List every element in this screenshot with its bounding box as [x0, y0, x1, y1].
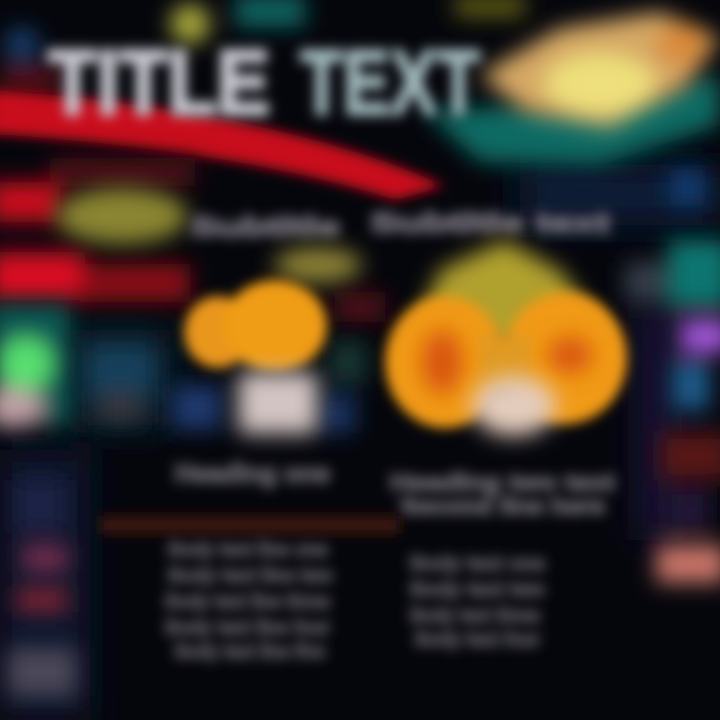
text block: left card: Body text line five — [175, 641, 325, 663]
text block: left card: Body text line two — [168, 565, 333, 587]
title: TITLE — [48, 32, 270, 134]
text block: right card: Body text four — [415, 629, 540, 651]
divider band — [100, 516, 400, 534]
text block: left card — [165, 539, 333, 663]
banner: teal band — [425, 75, 720, 165]
text block: right card: Body text three — [410, 605, 540, 627]
left column colour block — [0, 305, 70, 428]
small character: blue side shapes — [172, 340, 366, 433]
text block: right card — [410, 553, 545, 651]
top decorative colour accents — [0, 0, 705, 205]
small character: white base — [238, 372, 318, 434]
subtitle text: Subtitle — [190, 211, 340, 242]
large character — [385, 240, 627, 436]
red swoosh — [0, 90, 445, 200]
small character — [172, 247, 366, 434]
text block: left card: Body text line three — [165, 591, 330, 613]
text block: left card: Body text line one — [168, 539, 328, 561]
title — [48, 32, 480, 134]
subtitle text: Subtitle text — [370, 207, 610, 238]
background tints — [0, 165, 720, 720]
text block: right card: Body text one — [410, 553, 545, 575]
subtitle text — [190, 207, 610, 242]
large character: red centres — [422, 330, 592, 394]
large character: white base — [472, 376, 556, 436]
right column colour blocks — [625, 240, 720, 583]
large character: crown — [418, 240, 595, 350]
small character: orange body — [184, 280, 327, 372]
heading: right card: Heading two text — [390, 469, 615, 495]
text block: left card: Body text line four — [165, 617, 330, 639]
text block: right card: Body text two — [410, 579, 545, 601]
title: TEXT — [300, 32, 480, 134]
large character: orange body — [385, 292, 627, 428]
heading: left card: Heading one — [175, 458, 330, 488]
olive label — [56, 188, 188, 244]
heading: right card — [390, 469, 615, 519]
blue block — [90, 348, 152, 422]
small character: crown — [274, 247, 362, 283]
heading: right card: Second line here — [400, 493, 605, 519]
red accents — [0, 158, 385, 322]
left column list — [8, 480, 76, 696]
banner: glowing gold shape — [480, 12, 720, 128]
